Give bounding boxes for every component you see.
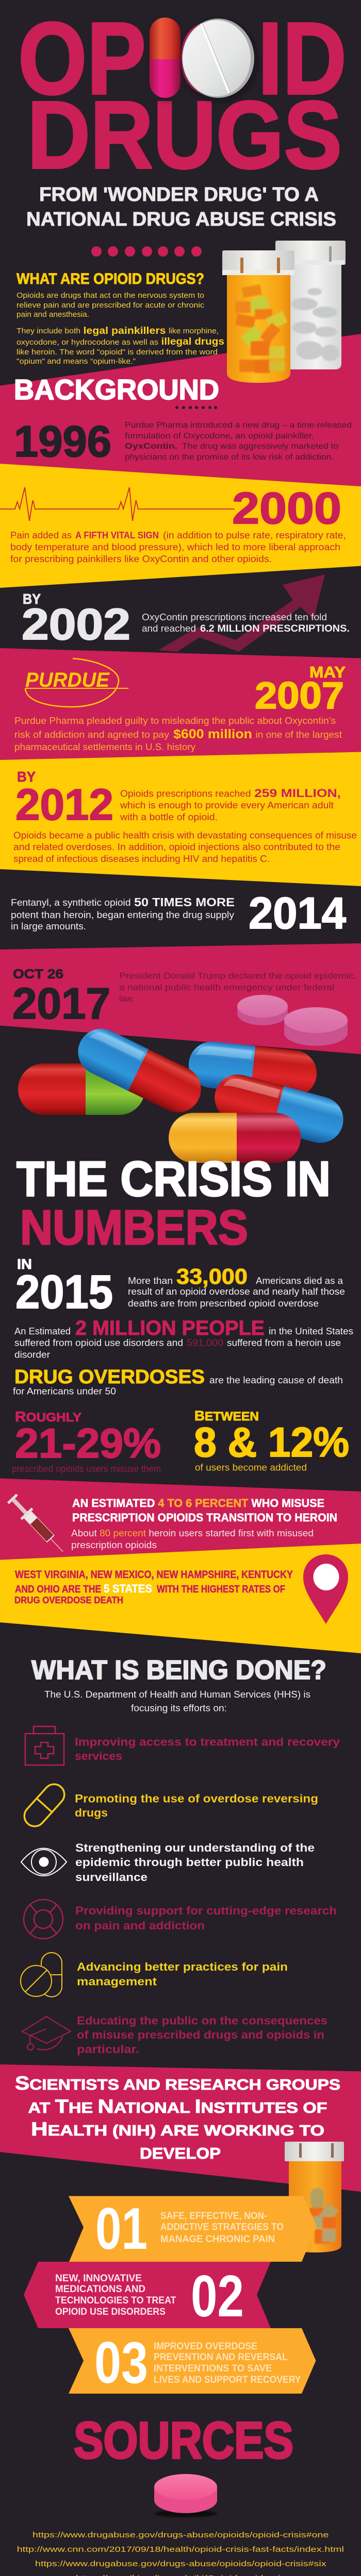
stat: roughly 21-29%	[12, 1409, 161, 1474]
text block: Purdue Pharma introduced a new drug – a time-released	[125, 421, 352, 430]
source list	[17, 2531, 344, 2576]
panel: what is being done	[20, 1655, 340, 2056]
text block: pharmaceutical settlements in U.S. history	[14, 742, 195, 752]
text block: $600 million	[173, 727, 252, 741]
capsule: yellow and red	[169, 1113, 301, 1163]
text block: intro: The U.S. Department of Health and Human Services (HHS) is	[44, 1689, 310, 1700]
text block: prescriptions: with a bottle of opioid.	[120, 812, 218, 822]
text	[75, 1792, 318, 1819]
text block: for prescribing painkillers like OxyContin and other opioids.	[10, 554, 272, 564]
text: of misuse prescribed drugs and opioids in	[77, 2028, 324, 2041]
text: SAFE, EFFECTIVE, NON-	[160, 2211, 267, 2222]
title: IO	[152, 2, 250, 116]
number: 02	[191, 2264, 244, 2329]
icon: heartbeat line	[0, 487, 235, 521]
text block: 6.2 MILLION PRESCRIPTIONS.	[200, 623, 350, 634]
source list: https://www.drugabuse.gov/drugs-abuse/opioids/opioid-crisis#six	[35, 2560, 326, 2568]
date: OCT 26	[13, 967, 63, 981]
item: treatment	[25, 1726, 340, 1765]
panel: scientists heading: SCIENTISTS AND RESEARCH GROUPS	[15, 2073, 340, 2094]
stat: 2 million people: suffered from a heroin use	[227, 1337, 341, 1348]
text block	[14, 716, 342, 752]
icon: tablet	[182, 19, 257, 101]
icon: lifebuoy	[24, 1900, 63, 1939]
text: Promoting the use of overdose reversing	[75, 1792, 318, 1805]
year: 2012	[15, 781, 113, 829]
text: NEW, INNOVATIVE	[55, 2273, 142, 2284]
text block: physicians on the promise of its low risk of addiction.	[125, 453, 334, 462]
panel: 2012	[13, 769, 357, 864]
date: 2007	[255, 675, 344, 717]
text	[77, 2014, 327, 2056]
panel: 2002	[22, 574, 350, 652]
panel: may 2007	[14, 658, 346, 752]
icon: capsule	[150, 18, 182, 101]
panel: ribbon 01	[69, 2196, 317, 2262]
heading: WHAT ARE OPIOID DRUGS?	[17, 270, 204, 287]
label: by: BY	[17, 769, 36, 785]
ribbon shape	[69, 2328, 316, 2394]
text block: formulation of Oxycodone, an opioid painkiller,	[125, 432, 314, 440]
text block: in large amounts.	[11, 921, 86, 931]
item: pain management	[21, 1953, 288, 1997]
text block: legal and illegal: They include both	[17, 327, 80, 335]
text: ADDICTIVE STRATEGIES TO	[160, 2222, 284, 2233]
text block: legal and illegal: oxycodone, or hydrocodone as well as	[17, 338, 158, 347]
stat: between 8 and 12%: 8 & 12%	[194, 1419, 349, 1466]
text: management	[77, 1975, 157, 1988]
text block	[14, 1569, 293, 1605]
title	[18, 2, 347, 189]
item: surveillance	[21, 1841, 315, 1884]
item: education	[22, 2014, 327, 2056]
text	[75, 1904, 337, 1932]
text block: legal and illegal: like morphine,	[169, 327, 219, 335]
text: OPIOID USE DISORDERS	[55, 2307, 166, 2317]
text block: The drug was aggressively marketed to	[182, 442, 338, 451]
text block: headline: PRESCRIPTION OPIOIDS TRANSITION TO HEROIN	[72, 1511, 337, 1524]
text block: Pain added as	[10, 530, 72, 540]
capsule: blue and red, angled	[70, 1021, 209, 1120]
text block: legal and illegal: illegal drugs	[161, 336, 224, 347]
stat: 2 million people	[14, 1317, 353, 1360]
text block: intro: focusing its efforts on:	[131, 1703, 227, 1714]
subtitle: FROM 'WONDER DRUG' TO A	[39, 184, 319, 206]
heading: WHAT IS BEING DONE?	[31, 1655, 326, 1685]
text: LIVES AND SUPPORT RECOVERY	[154, 2375, 301, 2385]
icon: pink tablets	[237, 995, 348, 1046]
panel: ribbon 02	[24, 2262, 271, 2329]
text block: WEST VIRGINIA, NEW MEXICO, NEW HAMPSHIRE, KENTUCKY	[15, 1569, 293, 1581]
text	[160, 2211, 284, 2245]
text block: prescriptions: Opioids prescriptions reached	[120, 788, 251, 799]
text block: a national public health emergency under federal	[119, 982, 334, 992]
text block: DRUG OVERDOSE DEATH	[14, 1595, 123, 1605]
capsule: red and blue	[209, 1070, 349, 1148]
text block: risk of addiction and agreed to pay	[14, 730, 169, 740]
text block: 80 percent: About 80 percent heroin users started first with misused	[71, 1528, 314, 1538]
stat: 2 million people: disorder	[14, 1350, 50, 1360]
text block: public health crisis: spread of infectious diseases including HIV and hepatitis C.	[13, 854, 270, 864]
icon: orange pill bottle	[222, 250, 294, 383]
panel: 2014	[11, 889, 346, 938]
text block: definition	[17, 291, 205, 319]
illustration: coloured capsules	[18, 1021, 349, 1163]
stat: 2 million people: An Estimated	[14, 1326, 71, 1336]
text block: law.	[119, 994, 134, 1004]
stat: 2015: result of an opioid overdose and nearly half those	[128, 1286, 345, 1297]
text: on pain and addiction	[75, 1919, 205, 1932]
heading	[17, 1151, 331, 1255]
text block: legal and illegal: legal painkillers	[84, 326, 166, 336]
text: PREVENTION AND REVERSAL	[154, 2352, 288, 2363]
panel: background 1996	[14, 374, 352, 466]
year: 1996	[14, 417, 111, 466]
dots divider	[175, 406, 217, 409]
text: Strengthening our understanding of the	[75, 1841, 315, 1854]
stat: 2015: Americans died as a	[256, 1276, 343, 1286]
title: OP	[18, 2, 146, 116]
text block: headline: AN ESTIMATED 4 TO 6 PERCENT WHO MISUSE	[72, 1497, 324, 1510]
text block: AND OHIO ARE THE	[15, 1584, 101, 1595]
text block: prescriptions	[120, 787, 341, 822]
text block	[11, 895, 235, 931]
icon: white pill bottle	[275, 241, 346, 369]
text block: OyxContin.	[125, 442, 177, 451]
text: TECHNOLOGIES TO TREAT	[55, 2295, 176, 2306]
text block: and reached	[142, 623, 196, 634]
text block	[10, 530, 346, 564]
icon: pink tablet	[154, 2474, 217, 2517]
stat: roughly 21-29%: ROUGHLY	[15, 1409, 81, 1425]
item: overdose reversing	[20, 1780, 318, 1831]
text: epidemic through better public health	[75, 1856, 304, 1869]
stat: 2015: 33,000	[176, 1264, 248, 1289]
icon: tall orange bottle	[285, 2142, 344, 2252]
panel: oct 2017	[12, 967, 356, 1046]
text block: public health crisis: Opioids became a public health crisis with devastating consequences of misuse	[13, 831, 357, 841]
text	[75, 1735, 340, 1762]
logo: purdue	[25, 658, 128, 707]
text: Providing support for cutting-edge research	[75, 1904, 337, 1917]
text block	[142, 612, 350, 634]
stat: drug overdoses: for Americans under 50	[13, 1386, 116, 1396]
text block: prescriptions: 259 MILLION,	[254, 787, 341, 800]
icon: capsule outline	[20, 1780, 69, 1831]
icon: map pin	[303, 1554, 348, 1624]
text	[77, 1960, 288, 1988]
stat: 2 million people: in the United States	[269, 1326, 353, 1336]
stat: 2015: More than	[128, 1276, 173, 1286]
text block: public health crisis: and related overdoses. In addition, opioid injections also contributed to the	[13, 842, 340, 852]
stat: drug overdoses: are the leading cause of death	[209, 1375, 343, 1385]
text block: President Donald Trump declared the opioid epidemic,	[119, 971, 356, 981]
heading: SOURCES	[74, 2412, 293, 2469]
stat: 2 million people: 2 MILLION PEOPLE	[75, 1317, 265, 1340]
stat: drug overdoses: DRUG OVERDOSES	[14, 1366, 205, 1388]
text: IMPROVED OVERDOSE	[154, 2341, 257, 2352]
panel: header	[18, 2, 347, 257]
panel: scientists heading: HEALTH (NIH) ARE WORKING TO	[31, 2119, 324, 2140]
panel: 2000	[0, 484, 346, 564]
year: 2002	[22, 600, 130, 649]
text block: legal and illegal: "opium" and means “opium-like.”	[17, 357, 136, 366]
item: research	[24, 1900, 337, 1939]
year: 2000	[232, 484, 341, 533]
panel: what are opioid drugs	[17, 270, 224, 366]
text block: (in addition to pulse rate, respiratory rate,	[163, 530, 346, 540]
text block: definition: relieve pain and are prescribed for acute or chronic	[17, 301, 205, 310]
panel: scientists heading: DEVELOP	[140, 2144, 221, 2162]
stat: 2015	[15, 1256, 345, 1318]
date: 2017	[12, 979, 110, 1028]
icon: rising arrow	[158, 574, 325, 652]
stat: 2015: 2015	[15, 1266, 113, 1318]
stat: 2 million people: suffered from opioid use disorders and	[14, 1337, 183, 1348]
dots divider	[91, 246, 202, 257]
stat: between 8 and 12%: BETWEEN	[194, 1408, 259, 1423]
text	[75, 1841, 315, 1884]
number: 01	[95, 2196, 147, 2262]
title: ID	[258, 2, 347, 116]
text block: definition: pain and anesthesia.	[17, 310, 89, 319]
text block: prescriptions: which is enough to provide every American adult	[120, 800, 334, 810]
text block: definition: Opioids are drugs that act on the nervous system to	[17, 291, 204, 300]
stat: drug overdoses	[13, 1366, 343, 1396]
text: particular.	[77, 2043, 139, 2056]
text block	[119, 971, 356, 1004]
text block: Purdue Pharma pleaded guilty to misleading the public about Oxycontin's	[14, 716, 336, 726]
stat: between 8 and 12%: of users become addicted	[195, 1462, 307, 1472]
icon: pills outline	[21, 1953, 62, 1997]
date: MAY	[309, 663, 346, 681]
text: MANAGE CHRONIC PAIN	[160, 2234, 275, 2245]
stat: roughly 21-29%: 21-29%	[15, 1420, 161, 1467]
text: Advancing better practices for pain	[77, 1960, 288, 1973]
text block: legal and illegal	[17, 326, 224, 366]
ribbon shape	[69, 2196, 317, 2262]
text	[55, 2273, 176, 2317]
text block: intro	[44, 1689, 310, 1714]
panel: scientists heading	[15, 2073, 340, 2162]
text: Educating the public on the consequences	[77, 2014, 327, 2027]
panel: ribbon 03	[69, 2328, 316, 2396]
ribbon shape	[24, 2262, 271, 2328]
text block	[125, 421, 352, 462]
text block: legal and illegal: like heroin. The word "opioid" is derived from the word	[17, 348, 218, 357]
text block: OxyContin prescriptions increased ten fold	[142, 612, 327, 622]
panel: five states	[14, 1554, 348, 1624]
icon: first aid kit	[25, 1726, 64, 1765]
text: drugs	[75, 1806, 108, 1819]
text block: 80 percent	[71, 1528, 314, 1550]
text block: 80 percent: prescription opioids	[71, 1540, 157, 1550]
heading: BACKGROUND	[14, 374, 219, 405]
icon: syringe	[6, 1493, 69, 1557]
capsule: red and green	[18, 1063, 145, 1115]
heading: NUMBERS	[20, 1200, 248, 1255]
icon: eye	[21, 1849, 67, 1876]
text	[154, 2341, 301, 2385]
stat: 2015: IN	[17, 1256, 32, 1272]
text: INTERVENTIONS TO SAVE	[154, 2363, 272, 2374]
panel: the crisis in numbers	[12, 1151, 353, 1474]
logo: purdue: PURDUE	[25, 669, 110, 691]
text: MEDICATIONS AND	[55, 2284, 145, 2295]
panel: sources	[17, 2412, 344, 2576]
text: Improving access to treatment and recovery	[75, 1735, 340, 1749]
source list: https://www.drugabuse.gov/drugs-abuse/opioids/opioid-crisis#one	[32, 2531, 329, 2539]
text block: potent than heroin, began entering the drug supply	[11, 910, 234, 920]
number: 03	[94, 2330, 148, 2396]
text: surveillance	[75, 1871, 147, 1884]
year: 2014	[249, 889, 346, 938]
capsule: blue and red, right	[186, 1039, 319, 1099]
panel: scientists heading: AT THE NATIONAL INSTITUTES OF	[28, 2096, 327, 2117]
stat: 2015: deaths are from prescribed opioid overdose	[128, 1298, 319, 1309]
text block: WITH THE HIGHEST RATES OF	[157, 1584, 285, 1595]
heading: THE CRISIS IN	[17, 1151, 331, 1207]
subtitle	[26, 184, 336, 230]
icon: graduation cap	[22, 2016, 71, 2050]
text block: 5 STATES	[104, 1582, 152, 1595]
subtitle: NATIONAL DRUG ABUSE CRISIS	[26, 209, 336, 230]
stat: roughly 21-29%: prescribed opioids users misuse them	[12, 1464, 161, 1474]
text: services	[75, 1750, 122, 1762]
panel: transition to heroin	[6, 1493, 337, 1557]
text block: Fentanyl, a synthetic opioid	[11, 897, 130, 908]
label: by: BY	[23, 591, 41, 607]
source list: http://www.cnn.com/2017/09/18/health/opioid-crisis-fast-facts/index.html	[17, 2545, 344, 2554]
text block: headline	[72, 1497, 337, 1524]
text block: A FIFTH VITAL SIGN	[75, 530, 159, 540]
text block: 50 TIMES MORE	[134, 895, 235, 909]
stat: 2 million people: 591,000	[187, 1337, 223, 1348]
text block: public health crisis	[13, 831, 357, 864]
text block: body temperature and blood pressure), which led to more liberal approach	[10, 542, 340, 552]
text block: in one of the largest	[256, 730, 342, 740]
